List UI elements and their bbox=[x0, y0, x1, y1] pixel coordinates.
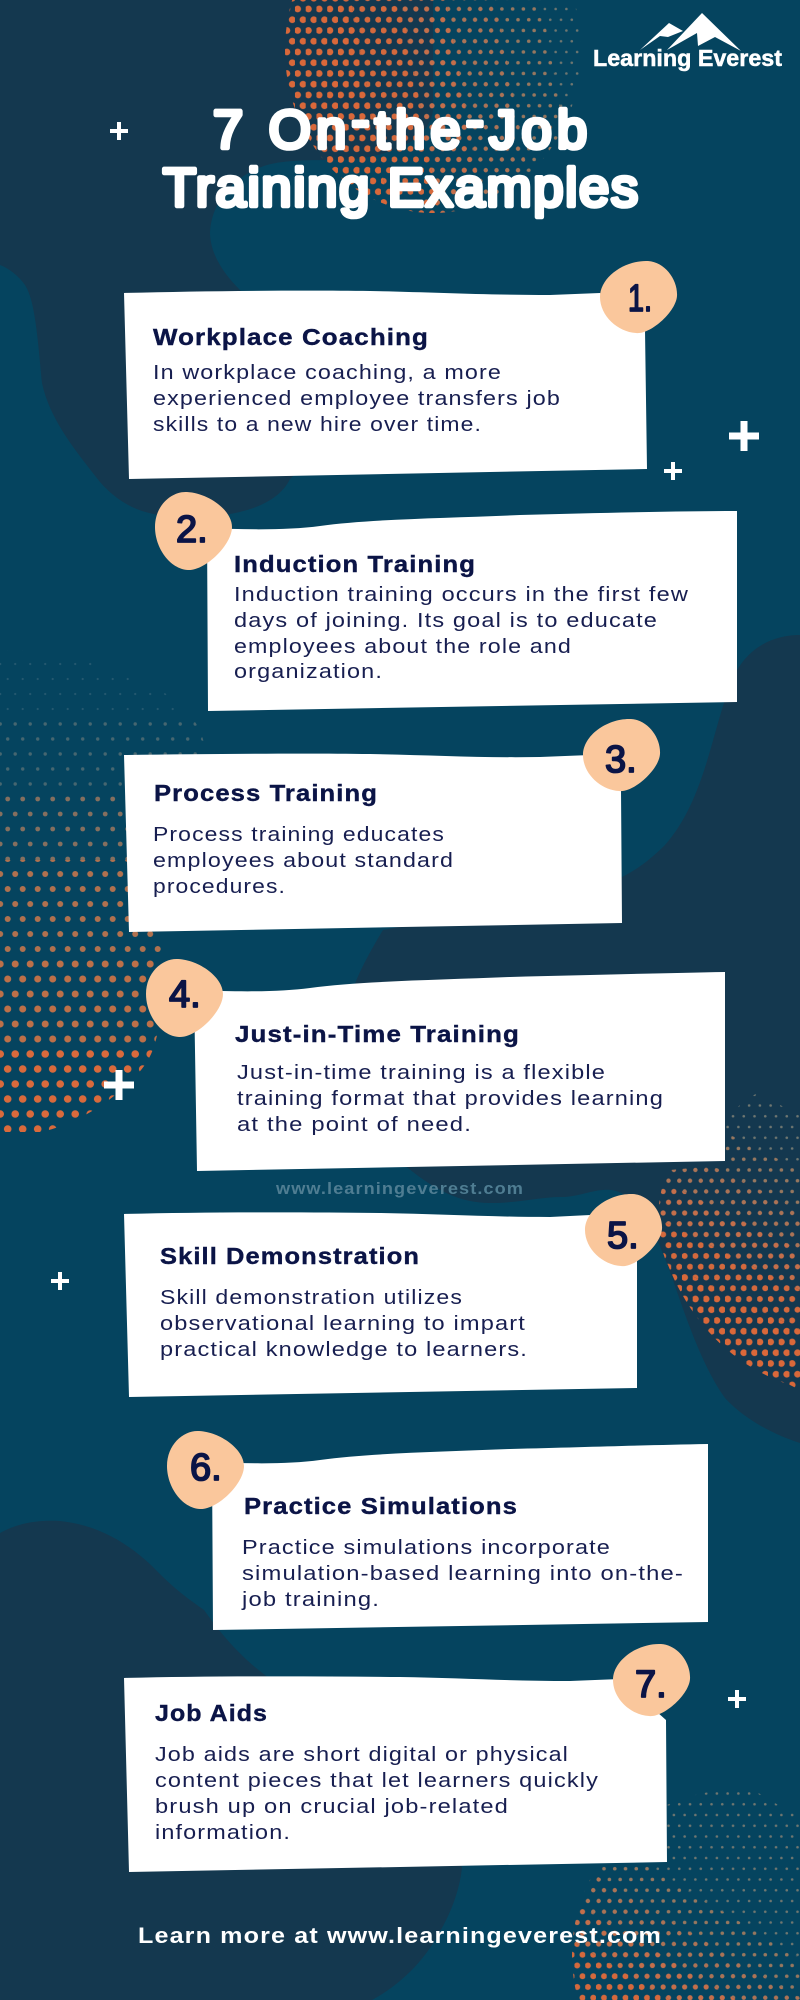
panel: 7 Job Aids bbox=[124, 1644, 690, 1872]
card background bbox=[194, 972, 725, 1171]
body text bbox=[153, 823, 454, 898]
card background bbox=[207, 511, 737, 711]
panel: 5 Skill Demonstration bbox=[124, 1194, 662, 1397]
panel: 6 Practice Simulations bbox=[167, 1431, 708, 1630]
body text: Practice simulations incorporate bbox=[242, 1536, 611, 1559]
card background bbox=[212, 1444, 708, 1630]
plus signs bbox=[51, 122, 759, 1708]
card background bbox=[124, 1676, 667, 1872]
body text: Process training educates bbox=[153, 823, 445, 846]
icon: mountains bbox=[640, 13, 741, 51]
heading: Practice Simulations bbox=[244, 1493, 518, 1519]
body text: simulation-based learning into on-the- bbox=[242, 1562, 684, 1585]
title: - bbox=[351, 90, 369, 150]
body text: at the point of need. bbox=[237, 1113, 472, 1136]
panel: 3 Process Training bbox=[124, 719, 660, 932]
plus bbox=[664, 462, 682, 480]
body text bbox=[155, 1743, 599, 1844]
body text: days of joining. Its goal is to educate bbox=[234, 609, 658, 632]
panel: 1 Workplace Coaching bbox=[124, 261, 677, 479]
badge bbox=[167, 1431, 244, 1509]
background blob: top left bbox=[0, 0, 433, 517]
body text bbox=[234, 583, 689, 683]
logo: Learning Everest bbox=[593, 13, 782, 71]
title: the bbox=[375, 100, 461, 160]
body text: Skill demonstration utilizes bbox=[160, 1286, 463, 1309]
number: 1. bbox=[628, 278, 652, 320]
body text bbox=[237, 1061, 664, 1136]
halftone dots: bottom right bbox=[572, 1792, 800, 2000]
body text bbox=[153, 361, 561, 436]
body text: employees about standard bbox=[153, 849, 454, 872]
heading: Workplace Coaching bbox=[153, 324, 429, 350]
background blob: bottom left bbox=[0, 1521, 462, 2000]
body text: observational learning to impart bbox=[160, 1312, 526, 1335]
badge bbox=[600, 261, 677, 333]
title bbox=[163, 90, 638, 218]
title: 7 On bbox=[213, 100, 346, 160]
body text: In workplace coaching, a more bbox=[153, 361, 502, 384]
body text bbox=[241, 1536, 684, 1611]
body text: information. bbox=[155, 1821, 291, 1844]
title: Training Examples bbox=[163, 158, 638, 218]
body text: brush up on crucial job-related bbox=[155, 1795, 509, 1818]
heading: Skill Demonstration bbox=[160, 1243, 420, 1269]
number: 4. bbox=[169, 974, 201, 1016]
heading: Job Aids bbox=[155, 1700, 268, 1726]
watermark url: www.learningeverest.com bbox=[275, 1179, 524, 1198]
number: 3. bbox=[605, 739, 637, 781]
badge bbox=[585, 1194, 662, 1266]
body text: training format that provides learning bbox=[237, 1087, 664, 1110]
card background bbox=[124, 1212, 637, 1397]
halftone dots: top bbox=[280, 0, 590, 215]
body text: skills to a new hire over time. bbox=[153, 413, 482, 436]
badge bbox=[146, 959, 223, 1037]
body text: Induction training occurs in the first few bbox=[234, 583, 689, 606]
body text: Just-in-time training is a flexible bbox=[237, 1061, 606, 1084]
title: Job bbox=[489, 100, 587, 160]
body text bbox=[160, 1286, 528, 1361]
badge bbox=[583, 719, 660, 791]
panel: 2 Induction Training bbox=[155, 492, 737, 711]
background blob: middle right bbox=[347, 635, 800, 1443]
plus bbox=[729, 421, 759, 451]
plus bbox=[110, 122, 128, 140]
badge bbox=[155, 492, 232, 570]
card background bbox=[124, 291, 647, 479]
body text: procedures. bbox=[153, 875, 286, 898]
plus bbox=[104, 1070, 134, 1100]
body text: organization. bbox=[234, 660, 383, 683]
body text: practical knowledge to learners. bbox=[160, 1338, 528, 1361]
number: 5. bbox=[607, 1215, 639, 1257]
card background bbox=[124, 754, 622, 932]
number: 6. bbox=[190, 1447, 222, 1489]
logo wordmark: Learning Everest bbox=[593, 45, 782, 71]
title: - bbox=[466, 90, 484, 150]
body text: experienced employee transfers job bbox=[153, 387, 561, 410]
body text: job training. bbox=[241, 1588, 380, 1611]
body text: Job aids are short digital or physical bbox=[155, 1743, 569, 1766]
heading: Just-in-Time Training bbox=[235, 1021, 520, 1047]
body text: employees about the role and bbox=[234, 635, 572, 658]
heading: Process Training bbox=[154, 780, 378, 806]
halftone dots: right bbox=[659, 1094, 800, 1388]
panel: 4 Just-in-Time Training bbox=[146, 959, 725, 1171]
heading: Induction Training bbox=[234, 551, 476, 577]
halftone dots: left bbox=[0, 650, 210, 1135]
plus bbox=[51, 1272, 69, 1290]
number: 7. bbox=[635, 1664, 667, 1706]
footer call to action: Learn more at www.learningeverest.com bbox=[138, 1923, 662, 1948]
badge bbox=[613, 1644, 690, 1716]
body text: content pieces that let learners quickly bbox=[155, 1769, 599, 1792]
number: 2. bbox=[176, 509, 208, 551]
plus bbox=[728, 1690, 746, 1708]
